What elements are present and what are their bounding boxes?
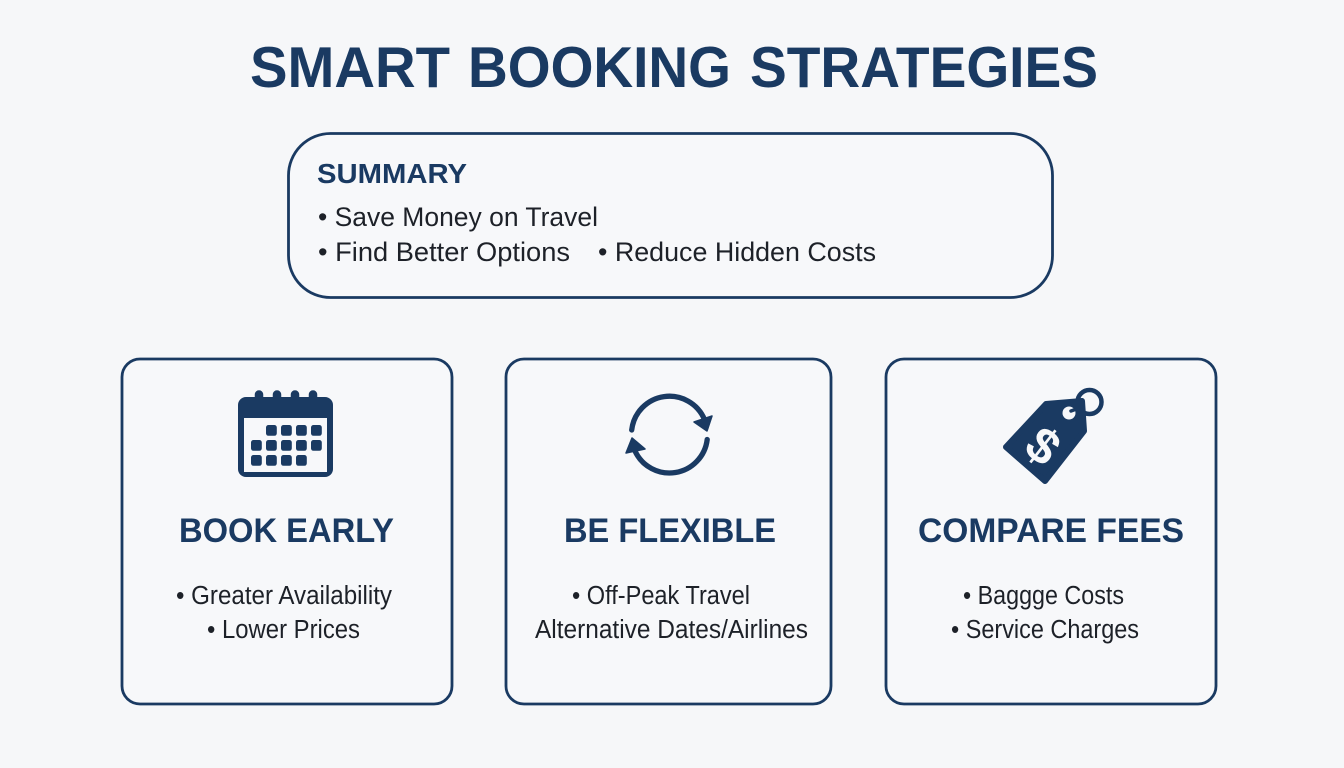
heading: book early: BOOK EARLY: [179, 512, 394, 550]
icon: price tag: [1006, 390, 1102, 481]
panel: compare fees: [886, 359, 1216, 704]
title: [250, 36, 1098, 100]
bullet: lower prices: • Lower Prices: [207, 616, 360, 644]
bullet: off-peak travel: • Off-Peak Travel: [572, 582, 750, 610]
bullet: service charges: • Service Charges: [951, 616, 1139, 644]
summary heading: SUMMARY: [317, 158, 467, 189]
text: alternative dates: Alternative Dates/Airlines: [535, 616, 808, 644]
summary bullet: hidden costs: • Reduce Hidden Costs: [598, 237, 876, 267]
icon: price tag: $: [1015, 415, 1071, 477]
icon: refresh arrows: [626, 396, 712, 473]
icon: calendar: [238, 394, 333, 477]
panel: book early: [122, 359, 452, 704]
panel: be flexible: [506, 359, 831, 704]
title: BOOKING: [468, 36, 731, 100]
summary bullet: better options: • Find Better Options: [318, 237, 570, 267]
bullet: baggage costs: • Baggge Costs: [963, 582, 1124, 610]
heading: be flexible: BE FLEXIBLE: [564, 512, 776, 550]
bullet: greater availability: • Greater Availability: [176, 582, 392, 610]
title: STRATEGIES: [750, 36, 1098, 100]
panel: summary: [288, 134, 1052, 298]
summary bullet: save money: • Save Money on Travel: [318, 202, 598, 232]
title: SMART: [250, 36, 450, 100]
heading: compare fees: COMPARE FEES: [918, 512, 1184, 550]
